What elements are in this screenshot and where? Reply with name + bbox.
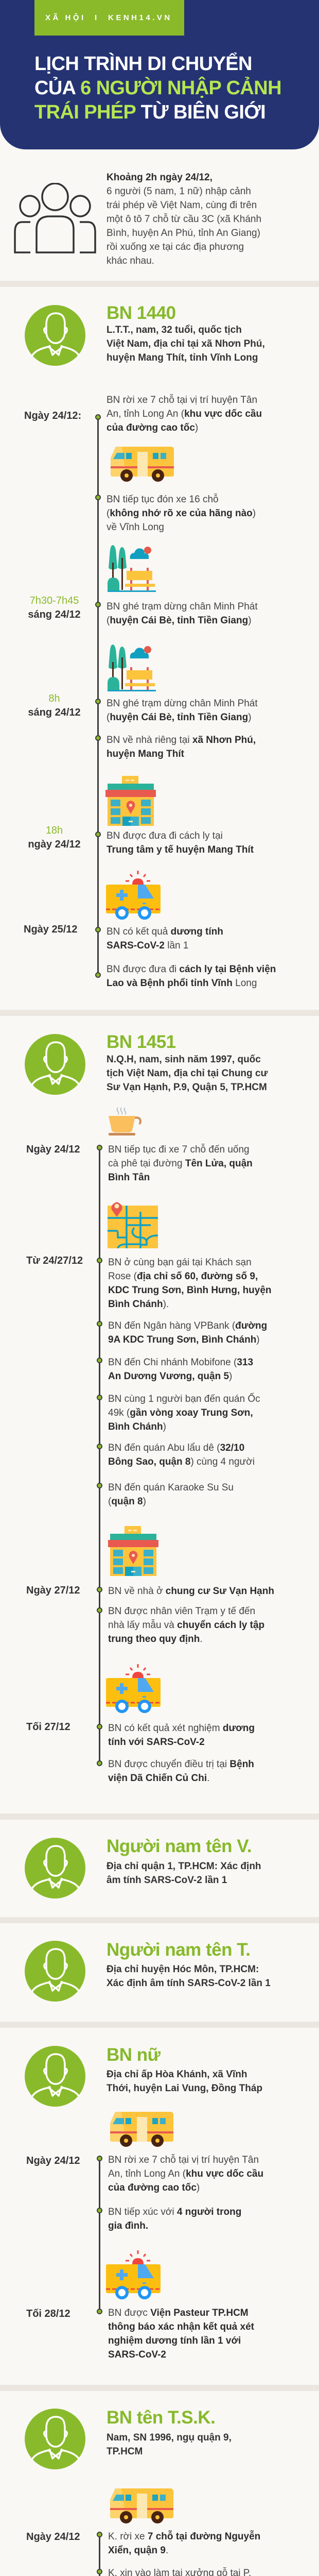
title <box>34 53 281 123</box>
event: rời xe 7 chỗ: BN rời xe 7 chỗ tại vị trí huyện Tân <box>107 395 257 405</box>
event: quán Ốc 49k: BN cùng 1 người bạn đến quán Ốc <box>108 1394 260 1404</box>
event: quán Ốc 49k <box>108 1393 260 1432</box>
intro text: Bình, huyện An Phú, tỉnh An Giang) <box>107 228 260 239</box>
avatar: BN 1440 <box>25 305 85 366</box>
event: dương tính: SARS-CoV-2 lần 1 <box>107 940 188 951</box>
event: rời xe (BN nữ): An, tỉnh Long An (khu vực dốc cầu <box>108 2168 263 2179</box>
intro text: 6 người (5 nam, 1 nữ) nhập cảnh <box>107 186 251 197</box>
timeline: T.S.K. <box>99 2535 100 2576</box>
event: Mobifone: BN đến Chi nhánh Mobifone (313 <box>108 1357 253 1368</box>
heading: BN nữ: BN nữ <box>107 2045 161 2065</box>
event: đón xe 16 chỗ: (không nhớ rõ xe của hãng nào) <box>107 508 256 519</box>
intro text: trái phép về Việt Nam, cùng đi trên <box>107 200 257 211</box>
event: trạm Minh Phát 1: (huyện Cái Bè, tỉnh Tiền Giang) <box>107 615 252 626</box>
icon: park <box>108 545 156 592</box>
icon: map <box>108 1202 158 1248</box>
event: đón xe 16 chỗ: về Vĩnh Long <box>107 522 164 533</box>
label: 7h30-7h45: 7h30-7h45 <box>30 595 79 606</box>
text: T.S.K. description: Nam, SN 1996, ngụ quận 9, <box>107 2432 232 2443</box>
event: Abu lẩu dê <box>108 1443 255 1467</box>
event: cà phê Tên Lửa: cà phê tại đường Tên Lửa, quận <box>108 1158 253 1169</box>
timeline: BN 1440 <box>97 417 99 975</box>
event: Mobifone <box>108 1357 253 1382</box>
icon: bus 3 <box>110 2488 173 2523</box>
avatar: BN tên T.S.K. <box>25 2409 85 2469</box>
event: lấy mẫu, cách ly: nhà lấy mẫu và chuyển cách ly tập <box>108 1620 264 1631</box>
event: K. rời xe: Xiển, quận 9. <box>108 2545 168 2556</box>
heading: Người nam tên V.: Người nam tên V. <box>107 1836 252 1856</box>
title: TRÁI PHÉP TỪ BIÊN GIỚI <box>34 101 265 123</box>
label: Ngày 25/12: Ngày 25/12 <box>24 924 78 935</box>
event: BV Dã Chiến Củ Chi: BN được chuyển điều trị tại Bệnh <box>108 1759 254 1770</box>
avatar: Người nam tên T. <box>25 1941 85 2002</box>
text: BN 1451 description: tịch Việt Nam, địa chỉ tại Chung cư <box>107 1068 268 1079</box>
icon: ambulance 3 <box>106 2250 161 2299</box>
text: BN nữ description: Thới, huyện Lai Vung, Đồng Tháp <box>107 2083 262 2094</box>
heading: BN 1451: BN 1451 <box>107 1032 176 1052</box>
event: trạm Minh Phát 1 <box>107 601 258 626</box>
heading: BN 1440: BN 1440 <box>107 303 176 323</box>
event: dương tính BN 1451: tính với SARS-CoV-2 <box>108 1737 205 1748</box>
header panel <box>0 0 319 149</box>
event: rời xe (BN nữ) <box>108 2153 263 2195</box>
event: đón xe 16 chỗ <box>107 494 256 533</box>
icon: coffee cup <box>109 1108 141 1136</box>
event: rời xe (BN nữ): của đường cao tốc) <box>108 2182 200 2193</box>
event: dương tính <box>107 926 223 951</box>
event: Karaoke Su Su <box>108 1482 234 1507</box>
event: K. rời xe <box>108 2530 260 2557</box>
event: lấy mẫu, cách ly: BN được nhân viên Trạm y tế đến <box>108 1606 255 1617</box>
event: Viện Pasteur: thông báo xác nhận kết quả xét <box>108 2321 254 2332</box>
event: VPBank <box>108 1320 267 1345</box>
event: quán Ốc 49k: 49k (gần vòng xoay Trung Sơn, <box>108 1408 253 1418</box>
text: T. description <box>107 1962 271 1990</box>
intro text: Khoảng 2h ngày 24/12, <box>107 172 212 183</box>
avatar: BN 1451 <box>25 1034 85 1095</box>
label: 8h: sáng 24/12 <box>28 707 81 718</box>
event: về nhà riêng: BN về nhà riêng tại xã Nhơn Phú, <box>107 735 256 745</box>
event: rời xe 7 chỗ <box>107 394 262 433</box>
event: Karaoke Su Su: (quận 8) <box>108 1496 146 1507</box>
event: tiếp xúc gia đình: gia đình. <box>108 2221 148 2231</box>
event: VPBank: 9A KDC Trung Sơn, Bình Chánh) <box>108 1334 260 1345</box>
event: cách ly TTYT Mang Thít: Trung tâm y tế huyện Mang Thít <box>107 844 254 855</box>
label: 8h <box>28 693 81 718</box>
icon: hospital 2 <box>108 1526 158 1576</box>
event: trạm Minh Phát 2: BN ghé trạm dừng chân Minh Phát <box>107 698 258 709</box>
text: T.S.K. description: TP.HCM <box>107 2446 143 2457</box>
event: đón xe 16 chỗ: BN tiếp tục đón xe 16 chỗ <box>107 494 219 505</box>
title: CỦA 6 NGƯỜI NHẬP CẢNH <box>34 77 281 99</box>
event: lấy mẫu, cách ly: trung theo quy định. <box>108 1634 203 1645</box>
intro text: khác nhau. <box>107 256 154 266</box>
event: cách ly BV Lao: BN được đưa đi cách ly tại Bệnh viện <box>107 964 276 975</box>
label: 8h: 8h <box>48 693 60 704</box>
event: khách sạn Rose: KDC Trung Sơn, Bình Hưng, huyện <box>108 1285 272 1296</box>
text: T.S.K. description <box>107 2431 232 2459</box>
text: BN 1440 description: L.T.T., nam, 32 tuổi, quốc tịch <box>107 325 242 335</box>
event: tiếp xúc gia đình <box>108 2205 241 2233</box>
icon: ambulance 2 <box>106 1664 161 1713</box>
text: T. description: Xác định âm tính SARS-CoV-2 lần 1 <box>107 1978 271 1989</box>
label: 7h30-7h45 <box>28 595 81 620</box>
event: Karaoke Su Su: BN đến quán Karaoke Su Su <box>108 1482 234 1493</box>
event: rời xe 7 chỗ: An, tỉnh Long An (khu vực dốc cầu <box>107 409 262 419</box>
label: 18h <box>28 825 81 850</box>
event: rời xe (BN nữ): BN rời xe 7 chỗ tại vị trí huyện Tân <box>108 2155 259 2165</box>
avatar: Người nam tên V. <box>25 1838 85 1899</box>
label: 18h: 18h <box>46 825 63 836</box>
event: tiếp xúc gia đình: BN tiếp xúc với 4 người trong <box>108 2207 241 2217</box>
tag: category <box>34 0 184 36</box>
intro text: một ô tô 7 chỗ từ cầu 3C (xã Khánh <box>107 214 261 225</box>
icon: group of people <box>14 183 96 253</box>
text: BN 1451 description <box>107 1054 268 1093</box>
event: Viện Pasteur: nghiệm dương tính lần 1 với <box>108 2335 241 2346</box>
event: K. rời xe: K. rời xe 7 chỗ tại đường Nguyễn <box>108 2531 260 2542</box>
event: cách ly BV Lao <box>107 964 276 989</box>
event: dương tính: BN có kết quả dương tính <box>107 926 223 937</box>
text: BN nữ description <box>107 2067 262 2095</box>
event: dương tính BN 1451 <box>108 1723 255 1748</box>
heading: BN tên T.S.K.: BN tên T.S.K. <box>107 2408 215 2428</box>
icon: hospital <box>105 776 156 826</box>
text: V. description <box>107 1861 261 1886</box>
text: BN nữ description: Địa chỉ ấp Hòa Khánh, xã Vĩnh <box>107 2069 247 2080</box>
event: BV Dã Chiến Củ Chi: viện Dã Chiến Củ Chi. <box>108 1773 209 1784</box>
timeline: BN 1451 <box>99 1148 100 1764</box>
label: Tối 27/12: Tối 27/12 <box>26 1721 70 1733</box>
event: về nhà riêng: huyện Mang Thít <box>107 749 184 759</box>
event: lấy mẫu, cách ly <box>108 1606 264 1645</box>
tag: category: XÃ HỘI I KENH14.VN <box>45 13 172 22</box>
event: Viện Pasteur: BN được Viện Pasteur TP.HCM <box>108 2308 249 2318</box>
event: cà phê Tên Lửa: BN tiếp tục đi xe 7 chỗ đến uống <box>108 1144 250 1155</box>
event: Viện Pasteur <box>108 2306 254 2362</box>
event: khách sạn Rose: Rose (địa chỉ số 60, đường số 9, <box>108 1271 258 1282</box>
label: Từ 24/27/12: Từ 24/27/12 <box>26 1255 83 1266</box>
icon: park 2 <box>108 645 156 691</box>
text: BN 1440 description <box>107 325 265 363</box>
title: LỊCH TRÌNH DI CHUYỂN <box>34 53 252 75</box>
label: Ngày 24/12: Ngày 24/12: <box>24 410 81 421</box>
heading: Người nam tên T.: Người nam tên T. <box>107 1940 250 1960</box>
event: quán Ốc 49k: Bình Chánh) <box>108 1421 166 1432</box>
event: Abu lẩu dê: BN đến quán Abu lẩu dê (32/10 <box>108 1443 244 1453</box>
event: cách ly TTYT Mang Thít: BN được đưa đi cách ly tại <box>107 831 223 841</box>
event: Viện Pasteur: SARS-CoV-2 <box>108 2349 166 2360</box>
label: Ngày 27/12: Ngày 27/12 <box>26 1585 80 1596</box>
event: khách sạn Rose: BN ở cùng bạn gái tại Khách sạn <box>108 1257 252 1268</box>
icon: bus <box>111 447 174 482</box>
intro text <box>107 172 261 266</box>
event: về chung cư: BN về nhà ở chung cư Sư Vạn Hạnh <box>108 1586 274 1597</box>
text: V. description: âm tính SARS-CoV-2 lần 1 <box>107 1875 227 1886</box>
event: khách sạn Rose: Bình Chánh). <box>108 1299 169 1310</box>
text: V. description: Địa chỉ quận 1, TP.HCM: Xác định <box>107 1861 261 1872</box>
event: Abu lẩu dê: Bông Sao, quận 8) cùng 4 người <box>108 1456 255 1467</box>
event: dương tính BN 1451: BN có kết quả xét nghiệm dương <box>108 1723 255 1734</box>
icon: bus 2 <box>110 2112 173 2147</box>
label: Ngày 24/12 (BN nữ): Ngày 24/12 <box>26 2155 80 2166</box>
event: cà phê Tên Lửa <box>108 1144 253 1183</box>
event: cách ly TTYT Mang Thít <box>107 831 254 855</box>
icon: ambulance <box>106 871 161 920</box>
event: Mobifone: An Dương Vương, quận 5) <box>108 1371 232 1382</box>
text: T. description: Địa chỉ huyện Hóc Môn, TP.HCM: <box>107 1964 259 1975</box>
event: VPBank: BN đến Ngân hàng VPBank (đường <box>108 1320 267 1331</box>
text: BN 1451 description: N.Q.H, nam, sinh năm 1997, quốc <box>107 1054 261 1065</box>
avatar: BN nữ <box>25 2046 85 2107</box>
label: Ngày 24/12 (BN 1451): Ngày 24/12 <box>26 1144 80 1155</box>
event: cách ly BV Lao: Lao và Bệnh phổi tỉnh Vĩnh Long <box>107 978 257 989</box>
event: rời xe 7 chỗ: của đường cao tốc) <box>107 422 198 433</box>
label: 18h: ngày 24/12 <box>28 839 81 850</box>
event: trạm Minh Phát 1: BN ghé trạm dừng chân Minh Phát <box>107 601 258 612</box>
event: BV Dã Chiến Củ Chi <box>108 1759 254 1784</box>
text: BN 1451 description: Sư Vạn Hạnh, P.9, Quận 5, TP.HCM <box>107 1082 267 1093</box>
label: 7h30-7h45: sáng 24/12 <box>28 609 81 620</box>
event: trạm Minh Phát 2 <box>107 698 258 723</box>
event: trạm Minh Phát 2: (huyện Cái Bè, tỉnh Tiền Giang) <box>107 712 252 723</box>
event: về nhà riêng <box>107 735 256 759</box>
intro text: rồi xuống xe tại các địa phương <box>107 242 244 252</box>
text: BN 1440 description: huyện Mang Thít, tỉnh Vĩnh Long <box>107 352 258 363</box>
label: Ngày 24/12 (K.): Ngày 24/12 <box>26 2531 80 2543</box>
text: BN 1440 description: Việt Nam, địa chỉ tại xã Nhơn Phú, <box>107 338 265 349</box>
label: Tối 28/12: Tối 28/12 <box>26 2308 70 2319</box>
timeline: BN nữ <box>99 2159 100 2312</box>
event: khách sạn Rose <box>108 1257 272 1310</box>
event: cà phê Tên Lửa: Bình Tân <box>108 1172 150 1183</box>
